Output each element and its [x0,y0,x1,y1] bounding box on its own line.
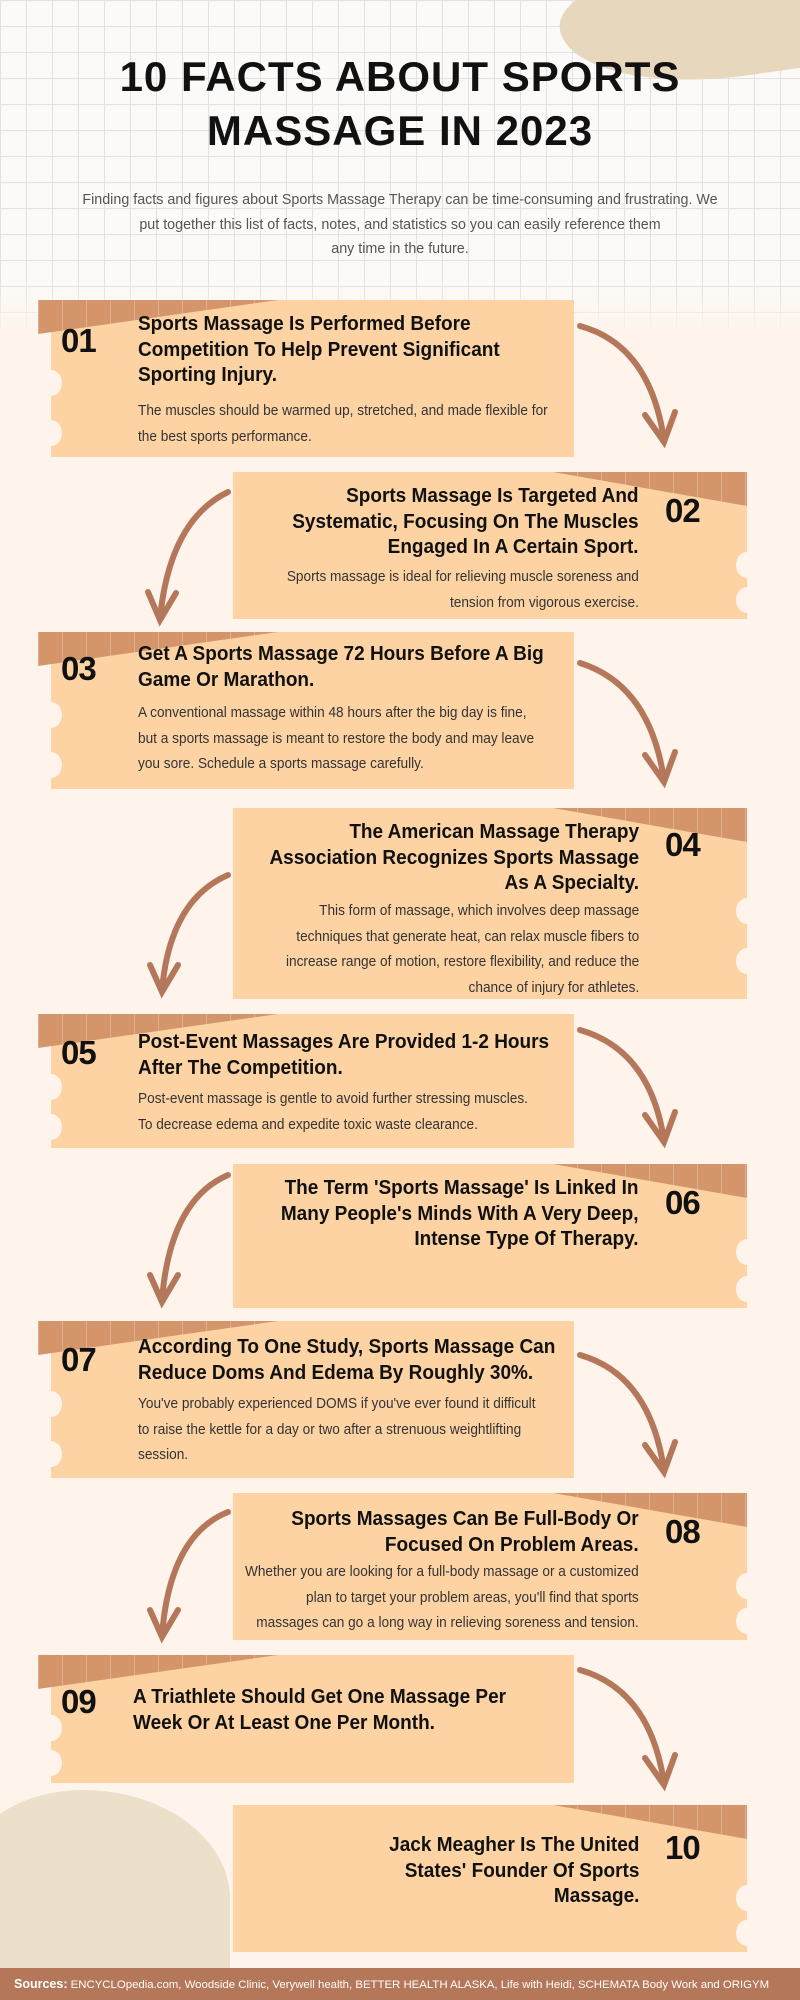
decoration: torn paper bottom-left [0,1790,230,1990]
heading [138,1031,549,1078]
body: Sports massage is ideal for relieving muscle soreness and [287,568,639,585]
subtitle [82,192,718,257]
heading: After The Competition. [138,1056,343,1078]
heading: Week Or At Least One Per Month. [133,1712,435,1734]
body: Whether you are looking for a full-body massage or a customized [245,1563,639,1580]
body: chance of injury for athletes. [468,978,639,996]
heading: Post-Event Massages Are Provided 1-2 Hours [138,1031,549,1053]
heading: As A Specialty. [505,872,639,894]
body: To decrease edema and expedite toxic waste clearance. [138,1116,478,1132]
body: increase range of motion, restore flexibility, and reduce the [286,953,639,970]
heading [138,1336,555,1384]
heading [389,1834,639,1907]
heading: Sports Massage Is Performed Before [138,313,471,335]
arrow 9 [577,1667,678,1792]
title: MASSAGE IN 2023 [207,107,593,154]
number: 03 [61,650,96,687]
heading: Sports Massage Is Targeted And [347,485,639,507]
heading: According To One Study, Sports Massage Can [138,1336,555,1358]
card 06 [233,1164,747,1308]
arrow 6 [147,1172,231,1308]
heading: Systematic, Focusing On The Muscles [293,510,639,532]
body [138,1090,528,1132]
body: session. [138,1446,188,1463]
title [120,53,680,154]
body [138,704,534,772]
body: tension from vigorous exercise. [450,594,639,610]
subtitle: any time in the future. [331,241,469,257]
body: You've probably experienced DOMS if you've ever found it difficult [138,1395,535,1412]
body [287,568,639,610]
sources bar: Sources: ENCYCLOpedia.com, Woodside Clinic, Verywell health, BETTER HEALTH ALASKA, Life with Heidi, SCHEMATA Body Work and ORIGYM [14,1977,769,1991]
number: 05 [61,1034,96,1071]
arrow 8 [147,1509,231,1644]
number: 01 [61,322,96,359]
body [138,402,548,444]
body: The muscles should be warmed up, stretched, and made flexible for [138,402,548,419]
body: massages can go a long way in relieving soreness and tension. [257,1614,639,1631]
decoration: torn paper top-right [553,0,800,100]
number: 07 [61,1341,96,1378]
card 05 [51,1014,574,1148]
heading: The Term 'Sports Massage' Is Linked In [285,1177,639,1199]
body: plan to target your problem areas, you'll find that sports [306,1588,639,1606]
arrow 3 [577,660,678,788]
body: A conventional massage within 48 hours after the big day is fine, [138,704,526,721]
heading: Association Recognizes Sports Massage [269,846,639,868]
heading: Sporting Injury. [138,364,277,386]
card 01 [51,300,574,457]
heading [269,821,639,894]
subtitle: Finding facts and figures about Sports Massage Therapy can be time-consuming and frustrating. We [82,192,718,208]
arrow 7 [577,1352,678,1478]
body: techniques that generate heat, can relax muscle fibers to [296,928,639,944]
heading: Many People's Minds With A Very Deep, [281,1202,639,1224]
body: to raise the kettle for a day or two after a strenuous weightlifting [138,1420,521,1438]
heading [292,485,639,558]
title: 10 FACTS ABOUT SPORTS [120,53,680,100]
body [245,1563,639,1631]
heading: States' Founder Of Sports [404,1860,639,1882]
number: 08 [665,1513,700,1550]
heading: Intense Type Of Therapy. [415,1228,639,1250]
card 08 [233,1493,747,1640]
heading: Competition To Help Prevent Significant [138,338,500,360]
card 02 [233,472,747,619]
arrow 1 [577,323,678,448]
arrow 2 [145,489,231,626]
body: This form of massage, which involves deep massage [319,902,639,919]
heading [138,313,500,386]
number: 04 [665,826,700,863]
body: but a sports massage is meant to restore the body and may leave [138,730,534,746]
arrow 5 [577,1027,678,1148]
heading: A Triathlete Should Get One Massage Per [133,1686,506,1708]
heading [292,1508,639,1556]
card 04 [233,808,747,999]
card 09 [51,1655,574,1783]
heading: Get A Sports Massage 72 Hours Before A Big [138,643,544,665]
heading: Engaged In A Certain Sport. [388,536,639,558]
body: the best sports performance. [138,428,312,444]
subtitle: put together this list of facts, notes, and statistics so you can easily reference them [139,216,661,232]
heading: Massage. [553,1885,639,1907]
sources bar [0,1968,800,2000]
body: Post-event massage is gentle to avoid further stressing muscles. [138,1090,528,1107]
heading [138,643,544,690]
card 03 [51,632,574,789]
heading: Focused On Problem Areas. [385,1534,639,1556]
heading: Sports Massages Can Be Full-Body Or [292,1508,639,1530]
number: 10 [665,1829,700,1866]
number: 02 [665,492,700,529]
heading: Reduce Doms And Edema By Roughly 30%. [138,1362,533,1384]
heading [281,1177,639,1250]
card 10 [233,1805,747,1952]
heading: Jack Meagher Is The United [389,1834,639,1856]
heading [133,1686,506,1734]
heading: The American Massage Therapy [349,821,639,843]
body [286,902,639,996]
number: 06 [665,1184,700,1221]
heading: Game Or Marathon. [138,668,314,690]
card 07 [51,1321,574,1478]
number: 09 [61,1683,96,1720]
arrow 4 [147,872,231,998]
body: you sore. Schedule a sports massage carefully. [138,755,424,772]
body [138,1395,536,1463]
